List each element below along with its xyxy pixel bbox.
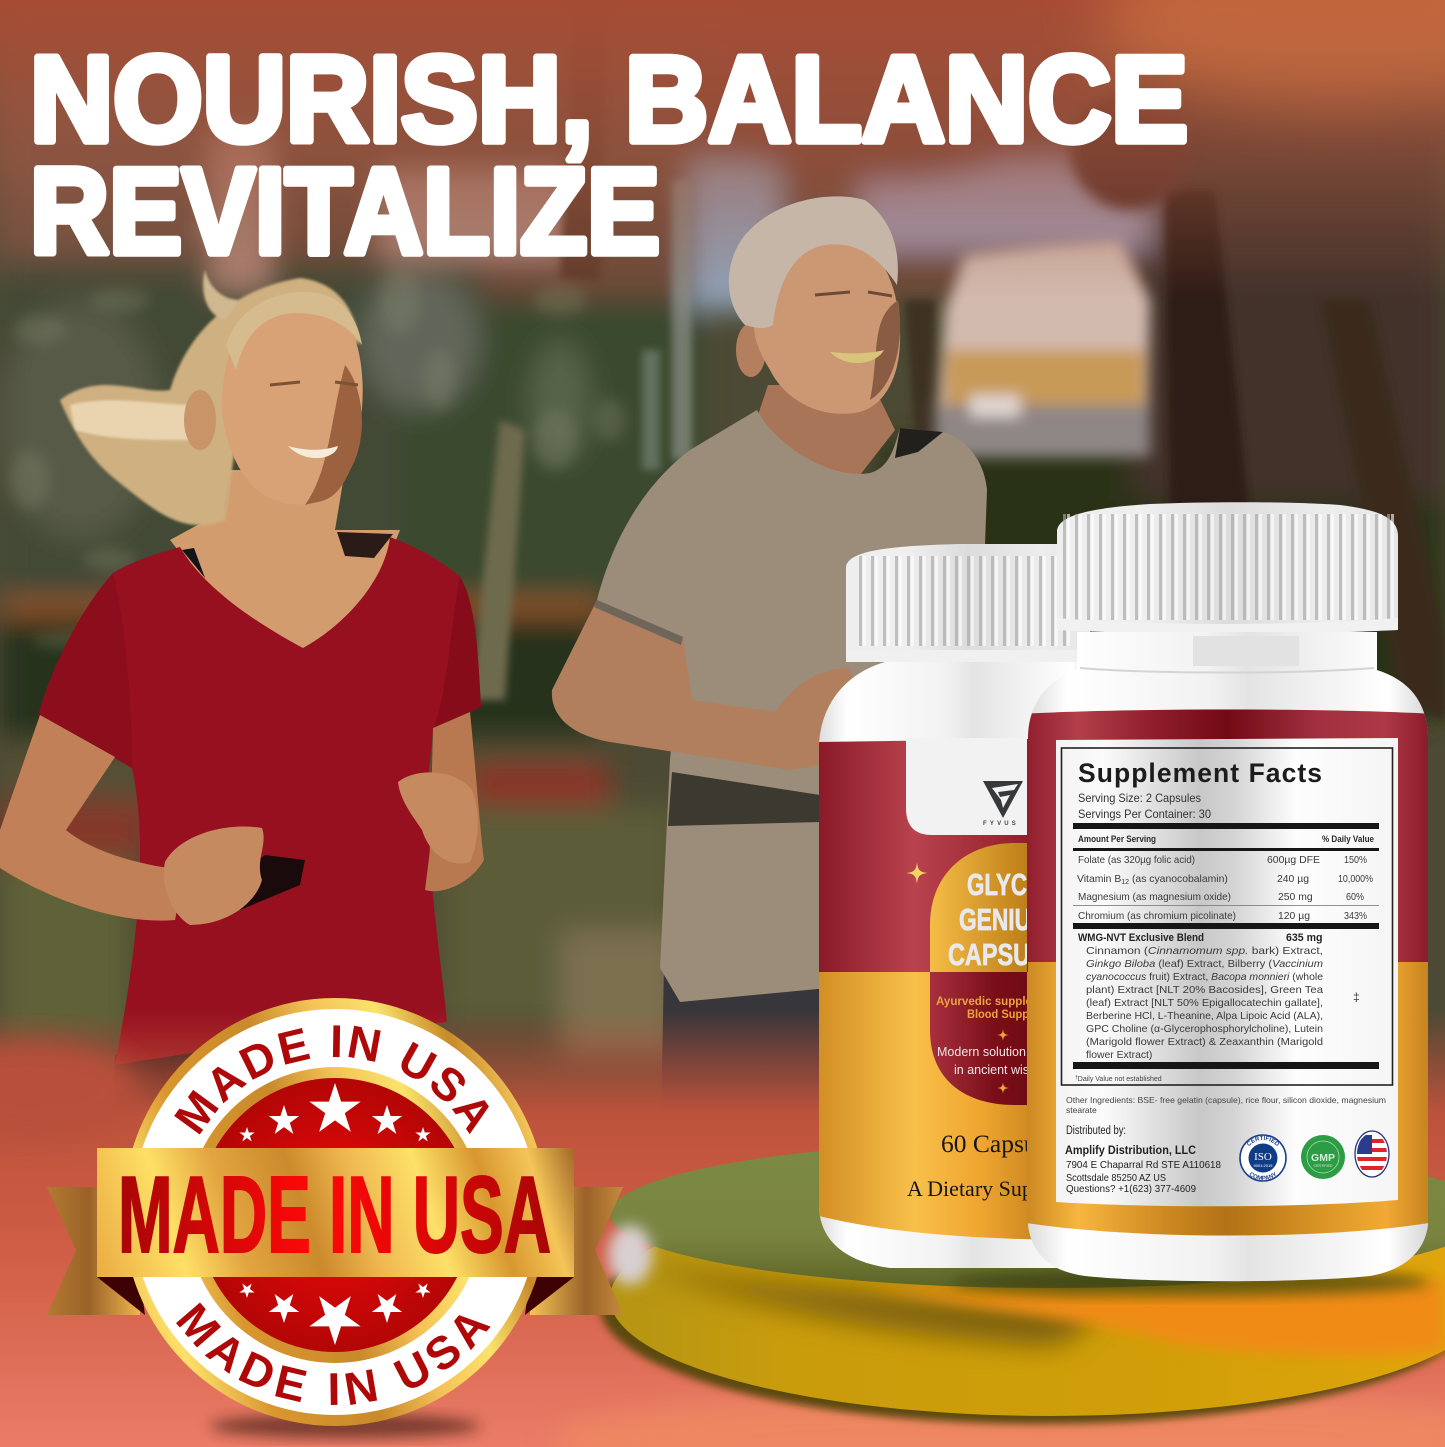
sleeve hem — [594, 600, 683, 645]
ribbon tail right — [525, 1187, 623, 1315]
disc side — [610, 1180, 1445, 1416]
distributor: 7904 E Chaparral Rd STE A110618 — [1066, 1159, 1221, 1171]
ribbon text: MADE IN USA — [118, 1154, 551, 1276]
near arm and fist — [0, 715, 185, 921]
left red floor wash — [0, 1040, 140, 1140]
dietary line: A Dietary Sup — [907, 1176, 1033, 1201]
icon: ISO badge: COMPANY — [1250, 1172, 1276, 1180]
white ring — [132, 1009, 538, 1415]
blend ingredients: GPC Choline (α-Glycerophosphorylcholine), Lutein — [1086, 1024, 1323, 1035]
nutrient rows: Chromium (as chromium picolinate) — [1078, 911, 1236, 922]
subtitle: Ayurvedic supple — [936, 994, 1032, 1008]
neck and body — [1028, 632, 1428, 1281]
blend heading — [1078, 932, 1323, 944]
nutrient rows: 60% — [1346, 892, 1364, 903]
far arm and fist — [425, 712, 484, 891]
cap — [1057, 502, 1398, 634]
product bottle: front — [819, 544, 1100, 1268]
bokeh leaves — [10, 216, 626, 648]
podium disc — [600, 1140, 1445, 1424]
facts box — [1062, 748, 1392, 1085]
tagline — [938, 1046, 1027, 1074]
nutrient rows: Magnesium (as magnesium oxide) — [1078, 892, 1231, 903]
icon: ISO badge — [1239, 1134, 1287, 1182]
neck and chest — [170, 470, 400, 660]
table header: % Daily Value — [1322, 834, 1374, 844]
blend heading: WMG-NVT Exclusive Blend — [1078, 932, 1204, 944]
nutrient rows: 250 mg — [1278, 892, 1313, 903]
title: Supplement Facts — [1078, 758, 1322, 788]
person: woman — [0, 270, 484, 1150]
blend ingredients — [1086, 946, 1360, 1061]
cap — [846, 544, 1090, 662]
ear — [184, 390, 216, 450]
distant building — [935, 90, 1190, 457]
neck — [758, 385, 895, 476]
badge shadow — [210, 1414, 480, 1438]
serving info: Serving Size: 2 Capsules — [1078, 791, 1201, 805]
serving info: Servings Per Container: 30 — [1078, 807, 1211, 821]
icon: ISO badge: 9001:2015 — [1254, 1163, 1273, 1168]
icon: GMP badge: GMP — [1311, 1152, 1335, 1164]
nutrient rows: 600µg DFE — [1267, 855, 1320, 866]
nutrient rows — [1077, 855, 1373, 922]
top warm colour overlay — [0, 0, 1445, 300]
blend ingredients: (Marigold flower Extract) & Zeaxanthin (Marigold — [1086, 1037, 1323, 1048]
icon: ISO badge: CERTIFIED — [1247, 1136, 1279, 1146]
nutrient rows: 150% — [1344, 855, 1367, 866]
inner red disc — [198, 1078, 472, 1352]
large sparkle — [906, 862, 928, 884]
icon: ISO badge: ISO — [1254, 1151, 1272, 1163]
bottle shadow on disc — [950, 1268, 1430, 1296]
ribbon tail left — [47, 1187, 145, 1315]
blend ingredients: Ginkgo Biloba (leaf) Extract, Bilberry ( Vaccinium — [1086, 959, 1323, 970]
nutrient rows: 120 µg — [1278, 911, 1310, 922]
logo panel — [906, 738, 1027, 835]
icon: GMP badge — [1301, 1135, 1345, 1179]
hair — [729, 196, 898, 328]
nutrient rows: Folate (as 320µg folic acid) — [1078, 855, 1195, 866]
t-shirt — [597, 410, 987, 1002]
blend ingredients: flower Extract) — [1086, 1050, 1152, 1061]
floor highlight right — [550, 1390, 1445, 1447]
body — [819, 662, 1100, 1268]
orange sheen — [860, 1280, 1445, 1356]
product name: GENIU — [959, 902, 1031, 937]
other ingredients — [1066, 1095, 1386, 1115]
tagline: in ancient wis — [954, 1063, 1029, 1077]
top arc text: MADE IN USA — [174, 1025, 489, 1134]
tree trunks — [470, 0, 1445, 720]
product bottle: rear with supplement facts — [1028, 502, 1428, 1282]
ear — [736, 323, 766, 377]
headline — [30, 31, 1188, 279]
table header — [1078, 834, 1374, 844]
other ingredients: Other Ingredients: BSE- free gelatin (capsule), rice flour, silicon dioxide, magnesium — [1066, 1095, 1386, 1105]
hair back — [60, 270, 360, 525]
icon: USA flag badge — [1355, 1131, 1389, 1177]
fist shadow on shirt — [240, 855, 305, 910]
distributor: Questions? +1(623) 377-4609 — [1066, 1183, 1196, 1195]
tagline: Modern solution — [937, 1045, 1026, 1059]
ground fade into red floor — [0, 1010, 1445, 1447]
nutrient rows: 343% — [1344, 911, 1367, 922]
small sparkles — [997, 1029, 1009, 1094]
dark sheen — [640, 1265, 1100, 1345]
blend ingredients: Cinnamon ( Cinnamomum spp. bark) Extract, — [1086, 946, 1323, 957]
serving info — [1078, 791, 1211, 821]
blend heading: 635 mg — [1286, 932, 1323, 944]
face — [222, 309, 363, 505]
product name — [948, 873, 1027, 966]
footnote: Daily Value not established — [1078, 1076, 1162, 1083]
distributor: Distributed by: — [1066, 1125, 1126, 1137]
distributor — [1065, 1125, 1221, 1195]
blend ingredients: cyanococcus fruit) Extract, Bacopa monnieri (whole — [1086, 972, 1323, 983]
centre ribbon — [97, 1148, 574, 1277]
arm — [552, 600, 868, 770]
inner gold ring — [187, 1067, 483, 1363]
shoulder line — [1080, 668, 1374, 672]
trousers — [660, 965, 830, 1175]
capsule count: 60 Capsu — [941, 1129, 1037, 1158]
headline line 1: NOURISH, BALANCE — [30, 31, 1188, 167]
blend ingredients: (leaf) Extract [NLT 50% Epigallocatechin gallate], — [1086, 998, 1323, 1009]
stars — [239, 1083, 431, 1345]
distributor: Scottsdale 85250 AZ US — [1066, 1172, 1166, 1184]
label wrap — [1020, 710, 1435, 1236]
headline line 2: REVITALIZE — [30, 143, 660, 279]
trousers — [112, 1040, 210, 1150]
shirt shadow — [668, 772, 822, 826]
red t-shirt — [38, 537, 481, 1065]
person: man — [552, 196, 987, 1175]
other ingredients: stearate — [1066, 1105, 1097, 1115]
nutrient rows: 240 µg — [1277, 874, 1309, 885]
bottom arc text: MADE IN USA — [176, 1302, 491, 1405]
rules — [1073, 823, 1379, 1069]
top right warm glow — [1100, 0, 1445, 110]
subtitle: Blood Supp — [967, 1007, 1029, 1021]
neck shade — [1193, 636, 1299, 666]
logo: FYVUS — [983, 821, 1019, 827]
label — [819, 738, 1032, 1240]
blend ingredients: ‡ — [1353, 990, 1360, 1004]
gold arch — [930, 843, 1027, 972]
nutrient rows: (as cyanocobalamin) — [1129, 874, 1228, 885]
table header: Amount Per Serving — [1078, 834, 1156, 844]
nutrient rows: 10,000% — [1338, 874, 1373, 885]
blend ingredients: plant) Extract [NLT 20% Bacosides], Green Tea — [1086, 985, 1323, 996]
face — [754, 237, 900, 414]
disc shadow on floor — [600, 1188, 1445, 1424]
product name: CAPSU — [948, 937, 1030, 972]
white facts label — [1056, 738, 1398, 1206]
label front art clipped by rear bottle — [906, 738, 1027, 1200]
outer gold ring — [123, 998, 547, 1426]
subtitle — [936, 996, 1027, 1020]
silver highlight — [608, 1225, 652, 1285]
footnote: † — [1075, 1075, 1078, 1081]
made in USA badge — [47, 998, 623, 1426]
neckline shadow — [337, 532, 393, 558]
blend ingredients: Berberine HCl, L-Theanine, Alpa Lipoic Acid (ALA), — [1086, 1011, 1323, 1022]
icon: GMP badge: CERTIFIED — [1314, 1164, 1333, 1168]
nutrient rows: 12 — [1121, 879, 1129, 886]
hairline — [226, 292, 362, 370]
distributor: Amplify Distribution, LLC — [1065, 1143, 1196, 1157]
disc top — [610, 1140, 1445, 1288]
red arch — [930, 972, 1027, 1105]
logo — [983, 781, 1023, 827]
product name: GLYC — [967, 867, 1027, 902]
nutrient rows: Vitamin B — [1077, 874, 1121, 885]
